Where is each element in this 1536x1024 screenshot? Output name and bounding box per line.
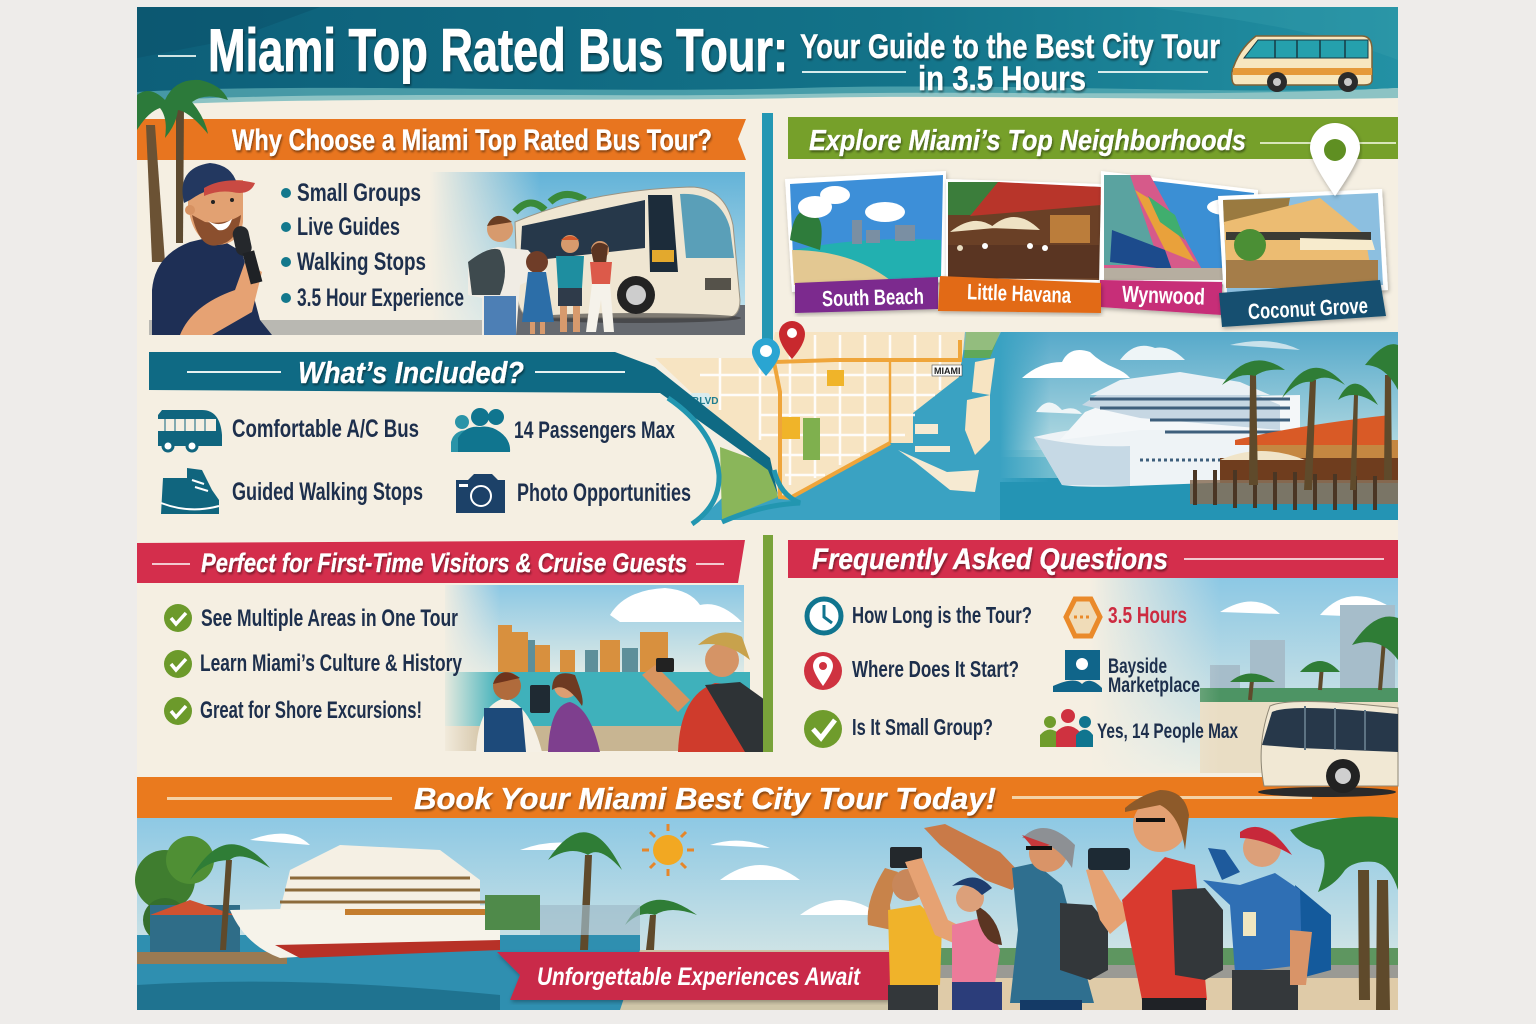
subtitle <box>800 28 1220 98</box>
feature list: Small Groups <box>297 179 421 207</box>
FAQ bus <box>1258 701 1398 797</box>
answer: Bayside Marketplace: Bayside <box>1108 655 1167 678</box>
question: tour length: How Long is the Tour? <box>852 602 1032 628</box>
heading: what's included <box>149 352 800 524</box>
cruise ship <box>230 845 640 958</box>
item: passengers: 14 Passengers Max <box>514 417 675 444</box>
banner: book your tour <box>137 777 1398 818</box>
icon: guide with microphone <box>152 163 272 335</box>
feature list: Live Guides <box>297 213 400 241</box>
left palm trees <box>137 80 228 262</box>
question: start: Where Does It Start? <box>852 656 1019 682</box>
tourist in pink shirt <box>905 858 1002 1010</box>
icon: white map pin <box>1310 123 1360 196</box>
answer: 3.5 hours <box>1066 599 1187 636</box>
answer: Bayside Marketplace <box>1053 650 1200 697</box>
checklist: Learn Miami’s Culture & History <box>200 650 462 677</box>
panel: neighborhoods <box>785 117 1398 327</box>
checklist: See Multiple Areas in One Tour <box>201 605 458 632</box>
label: Coconut Grove <box>1219 280 1386 327</box>
item: walking stops: Guided Walking Stops <box>232 478 423 506</box>
icon: people group <box>451 408 510 452</box>
man in red shirt <box>1086 790 1223 1010</box>
what's included card <box>149 390 718 524</box>
item: A/C bus <box>158 410 419 451</box>
map street grid <box>700 335 955 485</box>
question: group size: Is It Small Group? <box>852 714 993 740</box>
tree and pier <box>135 836 287 964</box>
icon: sun <box>642 824 694 876</box>
label: Coconut Grove: Coconut Grove <box>1247 293 1368 324</box>
panel: what's included <box>149 352 800 524</box>
checklist: Great for Shore Excursions! <box>200 697 422 724</box>
bus <box>515 187 741 323</box>
question: group size <box>804 710 993 748</box>
photo: South Beach <box>785 171 946 292</box>
icon: camera <box>456 474 505 513</box>
map <box>655 321 1001 520</box>
photo: Little Havana <box>946 179 1103 284</box>
tourists group <box>868 790 1331 1010</box>
heading: FAQ <box>788 540 1398 578</box>
icon: header minibus <box>1232 36 1372 92</box>
item: walking stops <box>161 468 423 514</box>
photo: Coconut Grove <box>1218 189 1388 300</box>
tourist in yellow shirt <box>868 847 942 1010</box>
subtitle: in 3.5 Hours <box>918 60 1086 98</box>
label: Little Havana: Little Havana <box>967 279 1072 308</box>
waterfront restaurant <box>1190 415 1398 510</box>
palms <box>190 832 697 950</box>
tourist couple <box>476 672 600 752</box>
icon: red map pin <box>779 321 805 359</box>
feature list <box>281 179 464 312</box>
item: passengers <box>451 408 675 452</box>
vertical divider: green <box>763 535 773 752</box>
icon: boot <box>161 468 219 514</box>
title: Miami Top Rated Bus Tour: <box>208 17 788 84</box>
panel: why choose <box>137 80 746 335</box>
cruise ship <box>1034 372 1300 487</box>
palm trees <box>1222 344 1398 490</box>
scene: skyline and tourists <box>440 585 768 752</box>
answer: Bayside Marketplace: Marketplace <box>1108 674 1200 697</box>
heading: neighborhoods <box>788 117 1398 159</box>
answer: 14 people max <box>1040 709 1238 747</box>
man in teal shirt pointing <box>924 824 1108 1010</box>
tourists by the bus <box>468 216 614 335</box>
feature list: 3.5 Hour Experience <box>297 284 464 312</box>
label: South Beach: South Beach <box>822 284 924 311</box>
subtitle: Your Guide to the Best City Tour <box>800 28 1220 66</box>
heading: first-time visitors <box>137 540 745 583</box>
callout: unforgettable experiences <box>497 952 890 1000</box>
heading: why choose <box>137 119 746 160</box>
palm tree right <box>1290 816 1398 1010</box>
heading: neighborhoods: Explore Miami’s Top Neighborhoods <box>809 125 1246 157</box>
label: Little Havana <box>938 276 1101 313</box>
label: South Beach <box>795 277 938 313</box>
scene: FAQ skyline <box>1090 578 1398 773</box>
icon: blue map pin <box>752 338 780 376</box>
callout: unforgettable experiences: Unforgettable Experiences Await <box>537 963 861 991</box>
vertical divider: teal <box>762 113 773 348</box>
heading: first-time visitors: Perfect for First-Time Visitors & Cruise Guests <box>201 548 687 578</box>
man in blue shirt <box>1203 827 1331 1010</box>
photo: Wynwood <box>1100 171 1258 285</box>
icon: bus <box>158 410 222 451</box>
answer: 14 people max: Yes, 14 People Max <box>1097 720 1238 743</box>
heading: FAQ: Frequently Asked Questions <box>812 543 1168 576</box>
bottom scene: harbor <box>135 815 1398 1010</box>
heading: what's included: What’s Included? <box>298 355 524 390</box>
photo strip: tour bus <box>137 80 745 335</box>
tourist taking photo <box>642 632 768 752</box>
item: A/C bus: Comfortable A/C Bus <box>232 415 419 443</box>
checklist <box>164 604 462 725</box>
answer: 3.5 hours: 3.5 Hours <box>1108 602 1187 628</box>
map label: BLVD badge: BLVD <box>692 396 718 407</box>
header banner <box>137 7 1398 106</box>
item: photo opportunities: Photo Opportunities <box>517 479 691 507</box>
question: tour length <box>807 599 1032 633</box>
feature list: Walking Stops <box>297 248 426 276</box>
item: photo opportunities <box>456 474 691 513</box>
label: Wynwood <box>1100 280 1222 315</box>
panel: first-time visitors <box>137 540 768 752</box>
question: start <box>804 652 1019 690</box>
banner: book your tour: Book Your Miami Best City Tour Today! <box>414 781 996 816</box>
panel: FAQ <box>788 540 1398 773</box>
scene: cruise ship at port <box>700 332 1398 520</box>
heading: why choose: Why Choose a Miami Top Rated Bus Tour? <box>232 124 712 157</box>
map: MIAMI <box>934 366 960 376</box>
label: Wynwood: Wynwood <box>1122 281 1205 310</box>
